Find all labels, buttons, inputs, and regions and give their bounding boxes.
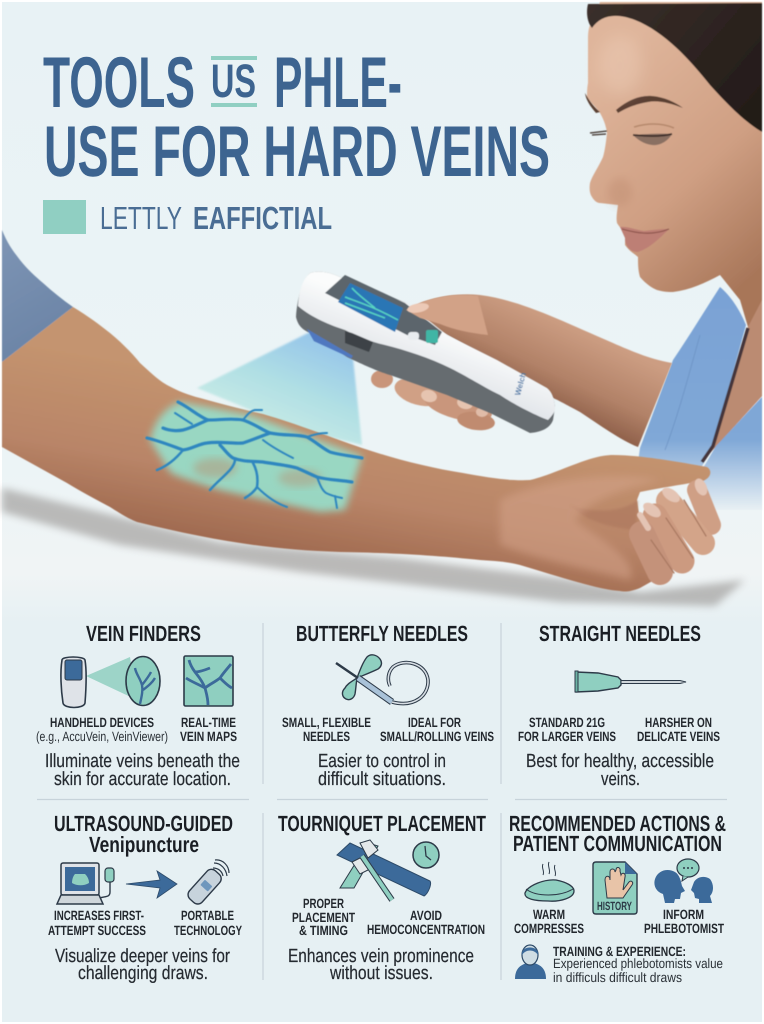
illustration: light cone bbox=[197, 332, 362, 445]
panel: ultrasound-guided venipuncture: PORTABLE bbox=[181, 908, 234, 923]
brand: Welch bbox=[513, 371, 528, 397]
panel: straight needles: veins. bbox=[601, 769, 640, 790]
description: Visualize deeper veins for bbox=[55, 946, 231, 967]
panel: tourniquet placement bbox=[278, 811, 486, 984]
lens bbox=[311, 333, 352, 357]
neck bbox=[702, 300, 762, 462]
icon: butterfly needle bbox=[336, 655, 428, 703]
panel: tourniquet placement: & TIMING bbox=[299, 923, 348, 938]
subtitle bbox=[43, 200, 332, 236]
dividers bbox=[37, 623, 727, 980]
icon: portable probe bbox=[186, 860, 229, 906]
icon: clock bbox=[413, 842, 439, 868]
icon: trained person bbox=[515, 945, 546, 979]
captions: WARM bbox=[533, 907, 565, 922]
arrow bbox=[126, 871, 177, 898]
title bbox=[43, 43, 550, 192]
white shell bbox=[298, 272, 555, 420]
description: Best for healthy, accessible bbox=[526, 751, 714, 772]
subtitle: LETTLY bbox=[100, 200, 182, 236]
fingers bbox=[642, 490, 711, 573]
panel: straight needles: DELICATE VEINS bbox=[637, 729, 720, 744]
icon: history document: HISTORY bbox=[597, 899, 632, 913]
panel: butterfly needles: NEEDLES bbox=[303, 729, 350, 744]
title: TOOLS bbox=[43, 43, 195, 123]
scrub seam bbox=[665, 335, 700, 450]
icon: inform phlebotomist heads bbox=[654, 859, 713, 903]
panel: ultrasound-guided venipuncture: ATTEMPT SUCCESS bbox=[48, 923, 146, 938]
illustration: clinician fingers bbox=[371, 370, 496, 433]
eyebrows bbox=[585, 93, 683, 113]
icon: straight needle bbox=[575, 671, 686, 692]
panel: straight needles bbox=[518, 621, 720, 790]
scrubs bbox=[638, 287, 746, 470]
panel: vein finders: REAL-TIME bbox=[181, 715, 236, 730]
panel: recommended actions and patient communication bbox=[509, 811, 726, 985]
illustration: glowing vein map bbox=[147, 402, 362, 512]
panel: ultrasound-guided venipuncture: challenging draws. bbox=[78, 963, 208, 984]
description: Easier to control in bbox=[318, 751, 446, 772]
panel: vein finders: (e.g., AccuVein, VeinViewer) bbox=[36, 729, 168, 744]
heading: VEIN FINDERS bbox=[86, 621, 201, 646]
panel: straight needles: HARSHER ON bbox=[645, 715, 712, 730]
illustration: clinician thumb bbox=[406, 295, 488, 335]
panel: tourniquet placement: PLACEMENT bbox=[292, 910, 356, 925]
panel: vein finders: VEIN MAPS bbox=[180, 729, 237, 744]
panel: straight needles: FOR LARGER VEINS bbox=[518, 729, 616, 744]
panel: tourniquet placement: AVOID bbox=[410, 908, 442, 923]
control panel bbox=[325, 275, 442, 345]
side button bbox=[345, 331, 373, 352]
eye bbox=[633, 134, 672, 145]
icon: real-time vein map bbox=[184, 656, 233, 706]
illustration: handheld vein viewer device bbox=[296, 272, 555, 433]
icon: handheld device with beam and vein bbox=[61, 656, 160, 708]
captions: SMALL, FLEXIBLE bbox=[282, 715, 371, 730]
illustration: patient arm and hand bbox=[2, 230, 711, 592]
icon: tourniquet band bbox=[337, 840, 431, 900]
screen bbox=[338, 283, 403, 332]
right scrub panel bbox=[696, 397, 762, 510]
panel: tourniquet placement: without issues. bbox=[329, 963, 433, 984]
panel: butterfly needles: SMALL/ROLLING VEINS bbox=[380, 729, 494, 744]
training and experience note: in difficuls difficult draws bbox=[553, 970, 682, 985]
heading: BUTTERFLY NEEDLES bbox=[296, 621, 468, 646]
illustration: clinician face and scrubs bbox=[585, 2, 762, 510]
subtitle: EAFFICTIAL bbox=[193, 200, 332, 236]
heading: STRAIGHT NEEDLES bbox=[539, 621, 701, 646]
panel: vein finders: skin for accurate location. bbox=[54, 769, 231, 790]
training and experience note bbox=[553, 944, 723, 985]
panel: recommended actions and patient communication: PHLEBOTOMIST bbox=[644, 921, 725, 936]
captions: STANDARD 21G bbox=[529, 715, 605, 730]
panel: tourniquet placement: HEMOCONCENTRATION bbox=[367, 922, 485, 937]
description: Illuminate veins beneath the bbox=[45, 751, 240, 772]
buttons bbox=[408, 332, 419, 340]
panel: butterfly needles: difficult situations. bbox=[318, 769, 446, 790]
panel: ultrasound-guided venipuncture: TECHNOLOGY bbox=[174, 923, 242, 938]
arm and palm bbox=[2, 307, 710, 592]
icon: history document bbox=[593, 862, 637, 914]
panel: recommended actions and patient communication: INFORM bbox=[663, 907, 704, 922]
description: Enhances vein prominence bbox=[288, 946, 474, 967]
panel: ultrasound-guided venipuncture: Venipuncture bbox=[89, 832, 199, 857]
hair bbox=[587, 3, 762, 132]
table shadow bbox=[2, 488, 745, 606]
lips bbox=[620, 227, 669, 252]
panel: vein finders bbox=[36, 621, 240, 790]
body bbox=[296, 272, 555, 433]
illustration: clinician arm and hand bbox=[405, 294, 672, 447]
icon: ultrasound laptop bbox=[57, 863, 114, 904]
heading: ULTRASOUND-GUIDED bbox=[54, 811, 233, 836]
sleeve bbox=[2, 230, 73, 362]
icon: warm compresses bbox=[525, 862, 574, 901]
title: PHLE- bbox=[274, 43, 402, 123]
neckline shadow bbox=[702, 328, 748, 462]
neck and face bbox=[587, 2, 762, 462]
captions: PROPER bbox=[303, 896, 344, 911]
palm shading bbox=[570, 500, 638, 530]
panel: butterfly needles bbox=[282, 621, 494, 790]
nose shading bbox=[608, 178, 632, 206]
panel: ultrasound-guided venipuncture bbox=[48, 811, 242, 984]
panel: recommended actions and patient communication: COMPRESSES bbox=[514, 921, 584, 936]
heading: TOURNIQUET PLACEMENT bbox=[278, 811, 486, 836]
title: US bbox=[211, 54, 256, 107]
captions: INCREASES FIRST- bbox=[54, 908, 144, 923]
captions: HANDHELD DEVICES bbox=[50, 715, 154, 730]
training and experience note: Experienced phlebotomists value bbox=[553, 956, 723, 971]
panel: butterfly needles: IDEAL FOR bbox=[408, 715, 461, 730]
training and experience note: TRAINING & EXPERIENCE: bbox=[553, 944, 686, 959]
